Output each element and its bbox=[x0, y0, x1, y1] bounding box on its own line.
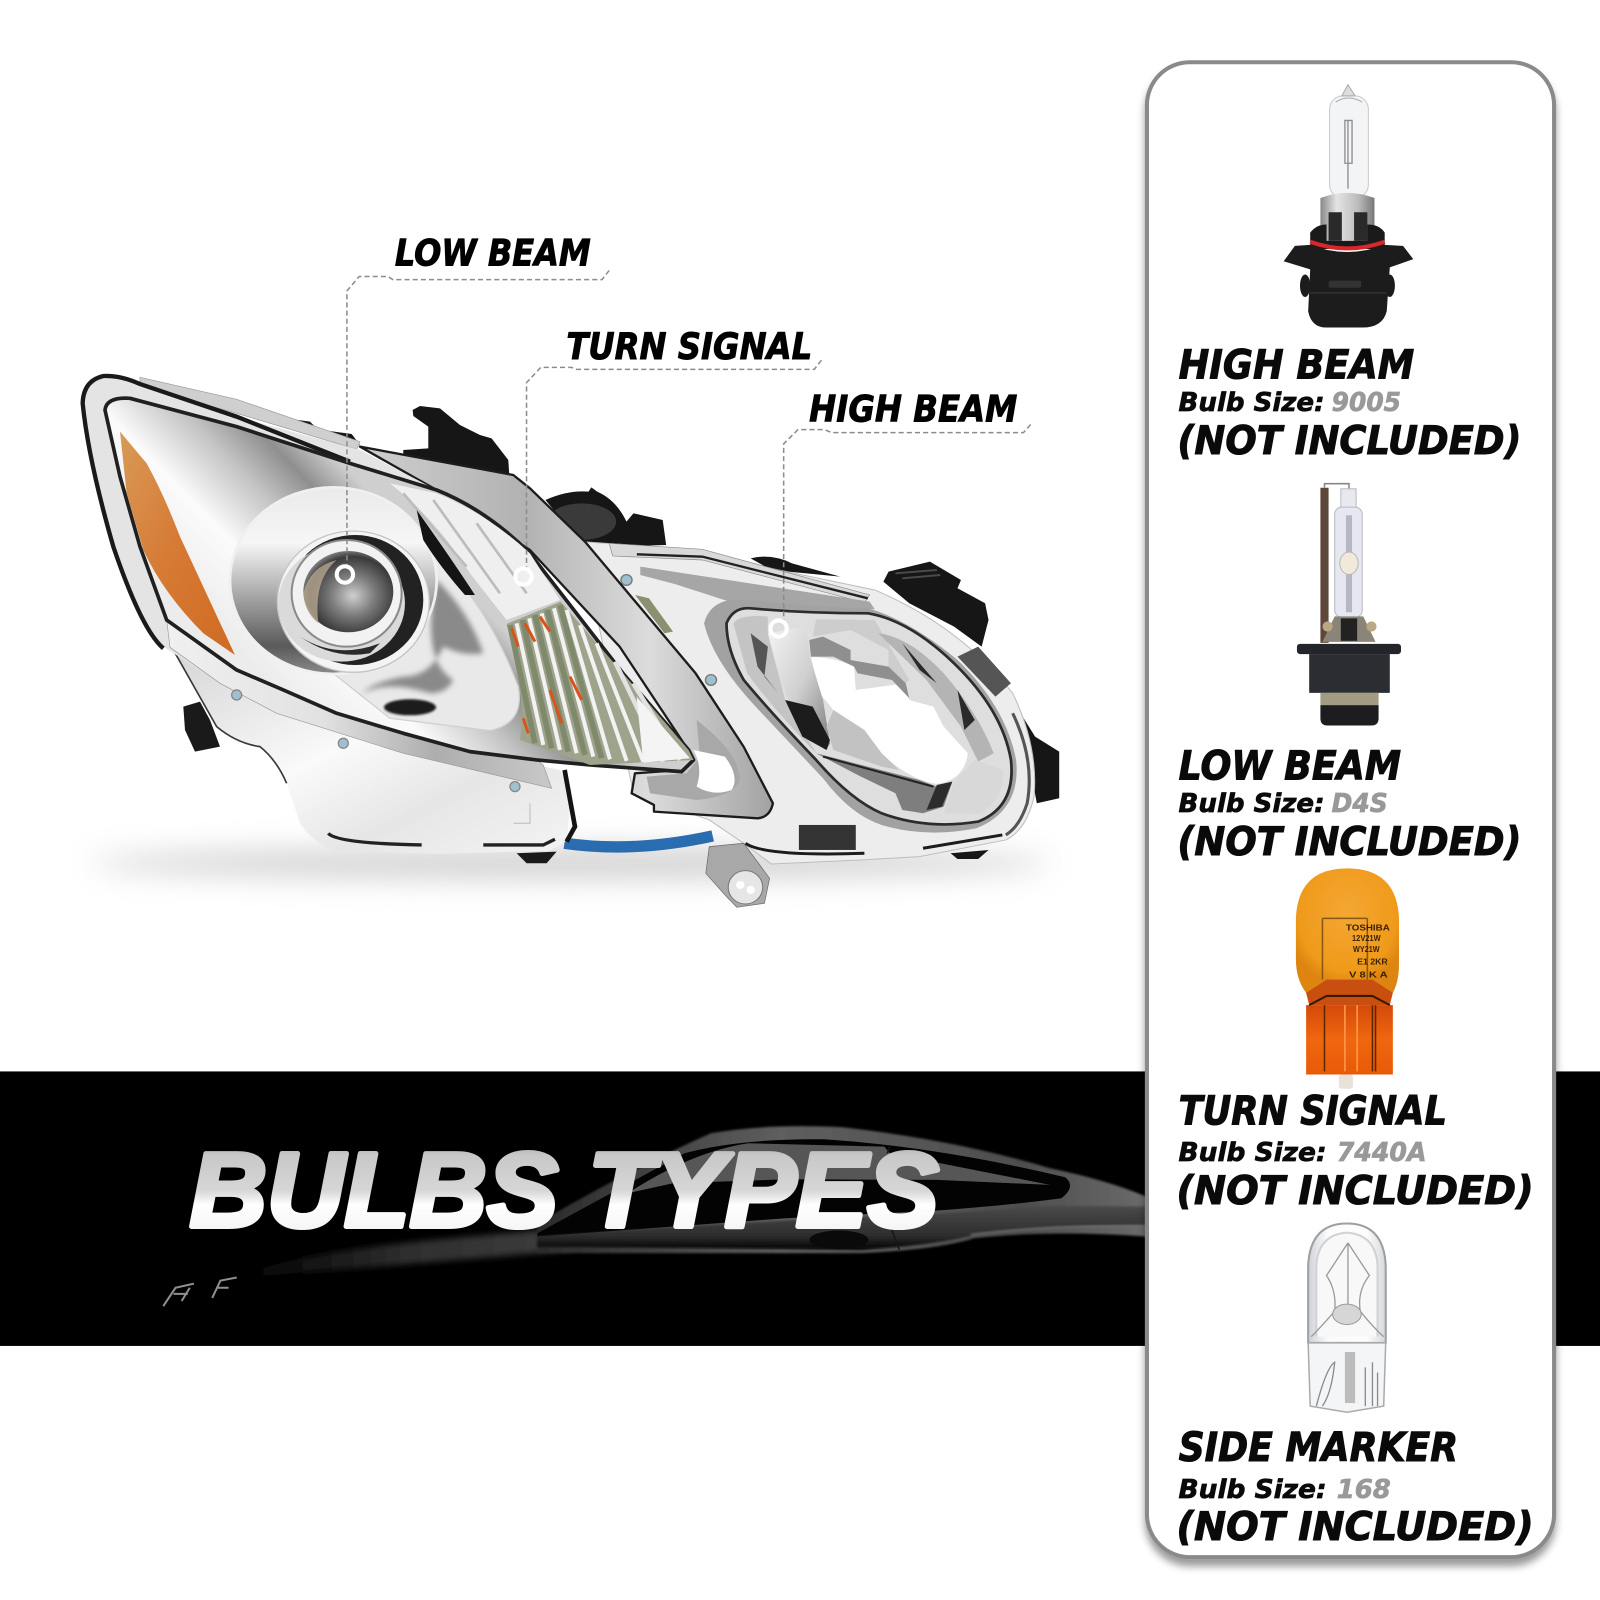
top mounting clips bbox=[293, 406, 509, 475]
heading: low beam: LOW BEAM bbox=[1179, 744, 1401, 790]
lower trim bbox=[745, 835, 1002, 854]
value: 7440A: 7440A bbox=[1337, 1138, 1427, 1168]
value: 168: 168 bbox=[1337, 1475, 1391, 1505]
turn signal ribs bbox=[507, 602, 694, 765]
icon: 9005 bulb bbox=[1284, 85, 1413, 328]
projector lens bbox=[277, 531, 429, 672]
callout: low beam bbox=[337, 231, 609, 583]
heading: high beam: HIGH BEAM bbox=[1179, 343, 1414, 389]
screws bbox=[232, 690, 520, 792]
upper chrome arms bbox=[609, 543, 875, 609]
note: not included: (NOT INCLUDED) bbox=[1178, 419, 1521, 464]
headlight assembly bbox=[82, 375, 1059, 907]
icon: 7440A amber bulb: TOSHIBA bbox=[1346, 924, 1390, 933]
bulb size label: Bulb Size: bbox=[1179, 1138, 1327, 1168]
icon: D4S bulb bbox=[1297, 484, 1401, 726]
lower chrome band bbox=[167, 620, 552, 788]
icon: 7440A amber bulb bbox=[1296, 868, 1399, 1089]
value: 9005: 9005 bbox=[1332, 388, 1401, 418]
callout: turn signal bbox=[515, 325, 821, 585]
blue wire bbox=[564, 836, 713, 847]
main lens bbox=[105, 398, 694, 772]
bulb size label: Bulb Size: bbox=[1179, 789, 1324, 819]
bulb size label: Bulb Size: bbox=[1179, 1475, 1327, 1505]
clear glass streaks bbox=[390, 483, 560, 620]
note: not included: (NOT INCLUDED) bbox=[1177, 1169, 1534, 1214]
icon: 7440A amber bulb: 12V21W bbox=[1352, 934, 1381, 943]
note: not included: (NOT INCLUDED) bbox=[1177, 1505, 1534, 1550]
heading: turn signal: TURN SIGNAL bbox=[1179, 1088, 1447, 1134]
bulb size label: Bulb Size: bbox=[1179, 388, 1324, 418]
diagonal chrome strip bbox=[360, 447, 773, 818]
wiring connector bbox=[706, 843, 770, 907]
black sliver bbox=[417, 510, 475, 595]
outer chrome rim bbox=[82, 375, 437, 753]
amber marker bbox=[120, 432, 235, 655]
right section of headlight bbox=[545, 487, 1059, 907]
projector surround bbox=[230, 487, 437, 674]
panel: bulb types bbox=[1147, 62, 1554, 1557]
lower white housing bbox=[173, 650, 575, 863]
black label block bbox=[799, 825, 856, 850]
icon: 168 clear bulb bbox=[1308, 1223, 1386, 1412]
right chrome rim bbox=[1006, 713, 1029, 835]
screws bbox=[621, 575, 716, 685]
title: BULBS TYPES bbox=[190, 1132, 939, 1250]
note: not included: (NOT INCLUDED) bbox=[1178, 820, 1521, 865]
black banner bbox=[0, 1071, 1600, 1346]
callout: low beam: LOW BEAM bbox=[395, 231, 591, 274]
black rear caps and connectors bbox=[545, 487, 1059, 859]
small green detail bbox=[635, 595, 673, 633]
callout: high beam bbox=[770, 387, 1031, 637]
value: D4S: D4S bbox=[1332, 789, 1388, 819]
reflector bowl bbox=[333, 547, 519, 731]
black side clip bbox=[183, 702, 220, 752]
high beam reflector bbox=[726, 608, 1012, 824]
callout: high beam: HIGH BEAM bbox=[809, 387, 1017, 430]
ground shadow bbox=[92, 848, 1051, 879]
heading: side marker: SIDE MARKER bbox=[1179, 1425, 1458, 1471]
icon: 7440A amber bulb: V 8 K A bbox=[1349, 971, 1388, 980]
car silhouette bbox=[240, 1126, 1146, 1278]
callout: turn signal: TURN SIGNAL bbox=[566, 325, 812, 368]
icon: 7440A amber bulb: WY21W bbox=[1353, 945, 1380, 954]
corner vent bbox=[958, 647, 1011, 697]
silver housing bbox=[582, 542, 1035, 864]
car headlight glints bbox=[163, 1278, 237, 1306]
icon: 7440A amber bulb: E1 2KR bbox=[1357, 957, 1388, 966]
grey reflector bezel bbox=[704, 600, 1017, 833]
